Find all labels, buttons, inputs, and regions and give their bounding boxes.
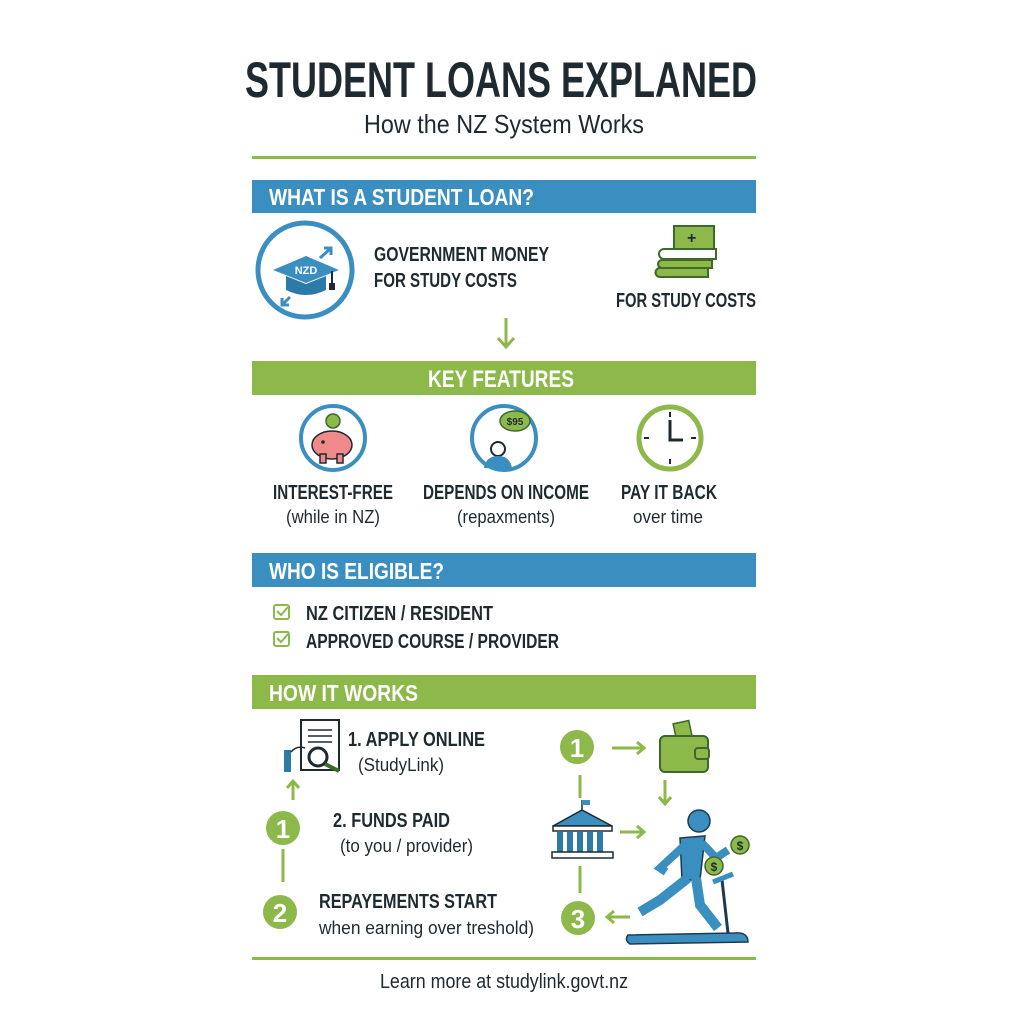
feature: depends on income: $95 [507,417,524,428]
left flow: circles and arrows: 2 [273,898,287,928]
icon: books [656,226,716,277]
section header: key features: KEY FEATURES [428,366,574,393]
step 2 text: (to you / provider) [340,836,473,856]
footer: Learn more at studylink.govt.nz [380,971,628,993]
right flow diagram: 3 [571,904,585,934]
eligibility list [274,603,559,653]
text: for study costs: FOR STUDY COSTS [616,290,756,312]
feature: depends on income [423,406,589,527]
eligibility list: APPROVED COURSE / PROVIDER [306,631,559,653]
section header: how it works: HOW IT WORKS [269,680,418,706]
step 1 text [348,729,485,775]
section header: who is eligible [252,553,756,587]
feature: pay it back: PAY IT BACK [621,482,717,504]
feature: pay it back [621,407,717,527]
subtitle: How the NZ System Works [364,109,644,139]
section header: what is a student loan [252,180,756,213]
text: government money [374,244,550,292]
step 1 text: 1. APPLY ONLINE [348,729,485,751]
section header: how it works [252,675,756,709]
icon: runner on treadmill [626,810,749,944]
step 3 text [318,891,534,938]
step 1 text: (StudyLink) [358,755,444,775]
left flow: circles and arrows [263,781,300,929]
text: government money: FOR STUDY COSTS [374,270,517,292]
right flow diagram: 1 [570,733,584,763]
text: government money: GOVERNMENT MONEY [374,244,550,266]
step 3 text: when earning over treshold) [318,918,534,938]
feature: pay it back: over time [633,507,703,527]
icon: wallet [660,721,709,772]
feature: depends on income: DEPENDS ON INCOME [423,482,589,504]
circle 3 [561,901,595,935]
section header: key features [252,361,756,395]
title: STUDENT LOANS EXPLANED [245,52,757,108]
feature: interest-free [273,406,393,527]
right flow diagram [552,721,749,944]
icon: document with magnifier [284,720,339,772]
feature: depends on income: (repaxments) [457,507,555,527]
icon: runner on treadmill: $ [711,860,718,874]
arrow down [498,318,514,347]
icon: NZD graduation cap: NZD [295,265,317,277]
feature: interest-free: INTEREST-FREE [273,482,393,504]
left flow: circles and arrows: 1 [276,814,290,844]
icon: runner on treadmill: $ [737,839,744,853]
feature: interest-free: (while in NZ) [286,507,380,527]
icon: books: + [687,230,696,247]
icon: bank [552,800,613,858]
step 3 text: REPAYEMENTS START [319,891,497,913]
circle 1 [560,730,594,764]
icon: NZD graduation cap [258,223,352,317]
section header: who is eligible: WHO IS ELIGIBLE? [269,558,444,584]
step 2 text [333,810,473,856]
step 2 text: 2. FUNDS PAID [333,810,450,832]
section header: what is a student loan: WHAT IS A STUDENT LOAN? [269,184,534,210]
eligibility list: NZ CITIZEN / RESIDENT [306,603,493,625]
